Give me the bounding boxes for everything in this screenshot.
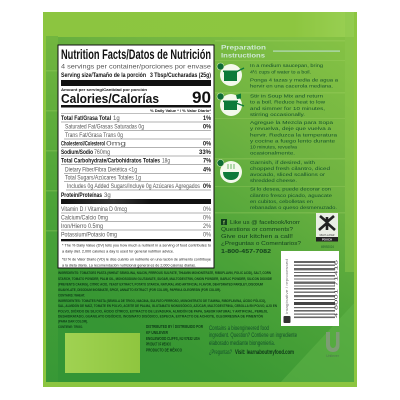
bioengineered text: [209, 326, 297, 356]
step 1 text: Ponga 4 tazas y media de agua a: [250, 78, 338, 82]
vitamin rows: [61, 207, 212, 238]
heading: preparation instructions: [221, 44, 340, 60]
ingredients text: POLVO, DIÓXIDO DE SILICIO, ÁCIDO CÍTRICO, EXTRACTO DE LEVADURA, ALMIDÓN DE PAPA, SABOR NATURAL Y ARTIFICIAL, PEREJIL: [58, 308, 269, 314]
nutrient rows: 0%: [203, 184, 212, 190]
nutrient rows: Total Carbohydrate/Carbohidratos Totales: [61, 158, 161, 164]
step 2 text: to a boil. Reduce heat to low: [250, 100, 326, 104]
vitamin rows: 0%: [203, 216, 212, 222]
contact block: Like us @ facebook/knorr: [230, 220, 300, 226]
footnotes: a daily diet. 2,000 calories a day is used for general nutrition advice.: [62, 248, 174, 254]
step 2 text: and simmer for 10 minutes,: [250, 106, 325, 111]
ingredients text: SAL, ALMIDÓN DE MAÍZ, TOMATE EN POLVO, ACEITE DE PALMA, GLUTAMATO MONOSÓDICO, AZÚCAR, MALTODEXTRINA, CEBOLLA EN POLVO, AJO EN: [58, 303, 277, 308]
distributor text: [146, 324, 203, 352]
blank code box: [65, 333, 140, 373]
nutrient rows: 1%: [203, 116, 212, 122]
icon: unilever logo: Unilever: [326, 354, 340, 358]
contact block: Give our kitchen a call!: [221, 234, 293, 240]
nutrient rows: Protein/Proteínas: [61, 193, 103, 199]
nutrient rows: 1g: [113, 116, 120, 122]
ingredients text: INGREDIENTS: TOMATOES PASTA (WHEAT SEMOLINA, NIACIN, FERROUS SULFATE, THIAMIN MONONITRATE, RIBOFLAVIN, FOLIC ACID), SALT, CORN: [58, 270, 271, 275]
ingredients text: GUANYLATE, DISODIUM INOSINATE, SPICE, ANNATTO EXTRACT (FOR COLOR), PAPRIKA OLEORESIN (FOR COLOR).: [58, 287, 221, 292]
icon: recycle pouch logo: [316, 213, 338, 249]
step 3 text: cilantro fresco picado, aguacate: [250, 193, 332, 198]
calories row: Amount per serving/Cantidad por porción: [61, 87, 148, 92]
vitamin rows: 0%: [203, 207, 212, 213]
step 1 text: In a medium saucepan, bring: [250, 63, 323, 68]
vitamin rows: 2%: [203, 224, 212, 230]
calories row: 90: [192, 88, 211, 107]
calories row: [61, 87, 211, 107]
icon: facebook: f: [223, 221, 225, 227]
calories row: Calories/Calorías: [61, 91, 159, 106]
footnotes: *El % de Valor Diario (VD) le dice cuánto un nutriente en una ración de alimento contribuye: [62, 256, 211, 262]
barcode: imaginative / reprocessed: [285, 259, 289, 314]
nutrient rows: Includes 0g Added Sugars/Incluye 0g Azúcares Agregados: [67, 184, 200, 190]
nutrient rows: 0%: [203, 124, 212, 130]
nutrient rows: 760mg: [94, 150, 110, 156]
contact block: ¿Preguntas o Comentarios?: [221, 241, 301, 247]
step 2 text: ocasionalmente.: [250, 150, 295, 156]
daily value header: % Daily Value * / % Valor Diario*: [150, 109, 212, 113]
nutrient rows: 4%: [203, 168, 212, 174]
nutrient rows: Total Fat/Grasa Total: [61, 116, 111, 122]
footnotes: a la dieta diaria. La recomendación nutricional general es de 2,000 calorías diarias.: [62, 262, 196, 268]
barcode: [281, 251, 339, 326]
step 3 text: shredded cheese.: [250, 178, 297, 183]
vitamin rows: Iron/Hierro 0.5mg: [61, 224, 103, 230]
pouch background: [43, 12, 357, 387]
step 1 icon: saucepan: [217, 63, 244, 86]
step 3 text: [250, 160, 337, 210]
barcode: 4 8001 71416: [334, 259, 338, 318]
ingredients text: INGREDIENTES: TOMATES PASTA (SEMOLA DE TRIGO, NIACINA, SULFATO FERROSO, MONONITRATO DE TIAMINA, RIBOFLAVINA, ÁCIDO FÓLICO),: [58, 298, 266, 303]
vitamin rows: Vitamin D / Vitamina D 0mcg: [61, 207, 127, 213]
nutrient rows: Sodium/Sodio: [61, 150, 93, 156]
serving size: Serving size/Tamaño de la porción: [61, 73, 146, 79]
footnotes: [62, 242, 211, 268]
nutrient rows: 3g: [104, 193, 111, 199]
step 3 text: en cubitos, cebolletas en: [250, 199, 313, 204]
nutrient rows: 33%: [199, 150, 212, 156]
nutrient rows: Trans Fat/Grasa Trans 0g: [65, 133, 123, 139]
ingredients text: STARCH, TOMATO POWDER, PALM OIL, MONOSODIUM GLUTAMATE, SUGAR, MALTODEXTRIN, ONION POWDER, GARLIC POWDER, SILICON DIOXIDE: [58, 276, 272, 281]
nutrient rows: Dietary Fiber/Fibra Dietética <1g: [65, 168, 137, 174]
icon: unilever logo: [326, 332, 340, 358]
nutrient rows: 7%: [203, 158, 212, 164]
vitamin rows: Potassium/Potasio 0mg: [61, 232, 117, 238]
bioengineered text: Visit: learnaboutmyfood.com: [235, 350, 294, 356]
nutrient rows: 18g: [162, 158, 170, 164]
step 3 text: chopped fresh cilantro, diced: [250, 166, 331, 171]
step 3 text: Garnish, if desired, with: [250, 160, 316, 165]
step 2 text: 10 minutes, revuelva: [250, 144, 297, 150]
servings per container: 4 servings per container/porciones por envase: [61, 64, 212, 70]
distributor text: DISTRIBUTED BY / DISTRIBUIDO POR: [146, 324, 203, 329]
nutrition title: Nutrition Facts/Datos de Nutrición: [61, 46, 211, 62]
ingredients text: (PREVENTS CAKING), CITRIC ACID, YEAST EXTRACT, POTATO STARCH, NATURAL AND ARTIFICIAL FLAVOR, DEHYDRATED PARSLEY, DISODIUM: [58, 282, 263, 286]
vitamin rows: Calcium/Calcio 0mg: [61, 216, 108, 222]
step 2 text: [250, 94, 338, 156]
step 2 icon: pouring mix: [217, 93, 244, 116]
step 3 text: avocado, sliced scallions or: [250, 172, 326, 177]
nutrient rows: Total Sugars/Azúcares Totales 1g: [65, 176, 141, 182]
nutrient rows: 0%: [203, 142, 212, 148]
nutrient rows: 0mg: [106, 142, 126, 148]
contact block: [221, 219, 301, 255]
step 1 text: [250, 63, 338, 88]
panel: nutrition facts: [58, 45, 214, 268]
step 2 text: Stir in Soup Mix and return: [250, 94, 324, 98]
step 2 text: y revuelva, deje que vuelva a: [250, 126, 332, 131]
contact block: Questions or comments?: [221, 227, 293, 233]
heading: preparation instructions: Preparation: [221, 44, 266, 52]
serving size: 3 Tbsp/Cucharadas (25g): [150, 73, 211, 79]
step 3 icon: soup bowl: [217, 160, 242, 183]
contact block: 1-800-457-7082: [221, 249, 271, 255]
step 1 text: 4½ cups of water to a boil.: [250, 68, 311, 74]
bioengineered text: ¿Preguntas?: [209, 350, 232, 356]
step 1 text: hervir en una cacerola mediana.: [250, 84, 333, 88]
icon: recycle pouch logo: POUCH: [322, 238, 332, 242]
bioengineered text: elaborado mediante biongeniería.: [209, 341, 275, 347]
ingredients text: [58, 270, 277, 329]
bioengineered text: ingredient. Question? Contiene un ingrediente: [209, 333, 297, 339]
distributor text: PRODUCT OF MEXICO: [146, 342, 171, 346]
step 2 text: y cocine a fuego lento durante: [250, 138, 336, 144]
vitamin rows: 0%: [203, 232, 212, 238]
distributor text: KF UNILEVER: [146, 330, 168, 335]
icon: recycle pouch logo: 69992024: [321, 245, 334, 249]
ingredients text: CONTAINS: WHEAT.: [58, 292, 85, 298]
step 2 text: Agregue la Mezcla para Sopa: [250, 120, 334, 125]
step 2 text: stirring occasionally.: [250, 112, 305, 117]
step 2 text: hervir. Reduzca la temperatura: [250, 132, 338, 138]
distributor text: ENGLEWOOD CLIFFS, NJ 07632 USA: [146, 336, 200, 341]
nutrient rows: Cholesterol/Colesterol: [61, 142, 105, 148]
ingredients text: (PARA DAR COLOR).: [58, 318, 88, 324]
nutrient rows: Saturated Fat/Grasas Saturadas 0g: [65, 124, 144, 130]
serving size: [61, 73, 211, 79]
ingredients text: DESHIDRATADO, GUANILATO DISÓDICO, INOSINATO DISÓDICO, ESPECIA, EXTRACTO DE ACHIOTE, OLEORRESINA DE PIMENTÓN: [58, 314, 263, 318]
icon: recycle pouch logo: MULTI-LAYER: [320, 234, 335, 237]
ingredients text: CONTIENE: TRIGO.: [58, 324, 83, 329]
bioengineered text: Contains a bioengineered food: [209, 326, 269, 332]
footnotes: * The % Daily Value (DV) tells you how much a nutrient in a serving of food contributes to: [62, 242, 211, 248]
distributor text: PRODUCTO DE MÉXICO: [146, 348, 183, 352]
step 3 text: Si lo desea, puede decorar con: [250, 186, 331, 192]
step 3 text: rebanadas o queso desmenuzado.: [250, 205, 337, 210]
heading: preparation instructions: Instructions: [221, 52, 266, 60]
nutrient rows: [61, 116, 212, 199]
